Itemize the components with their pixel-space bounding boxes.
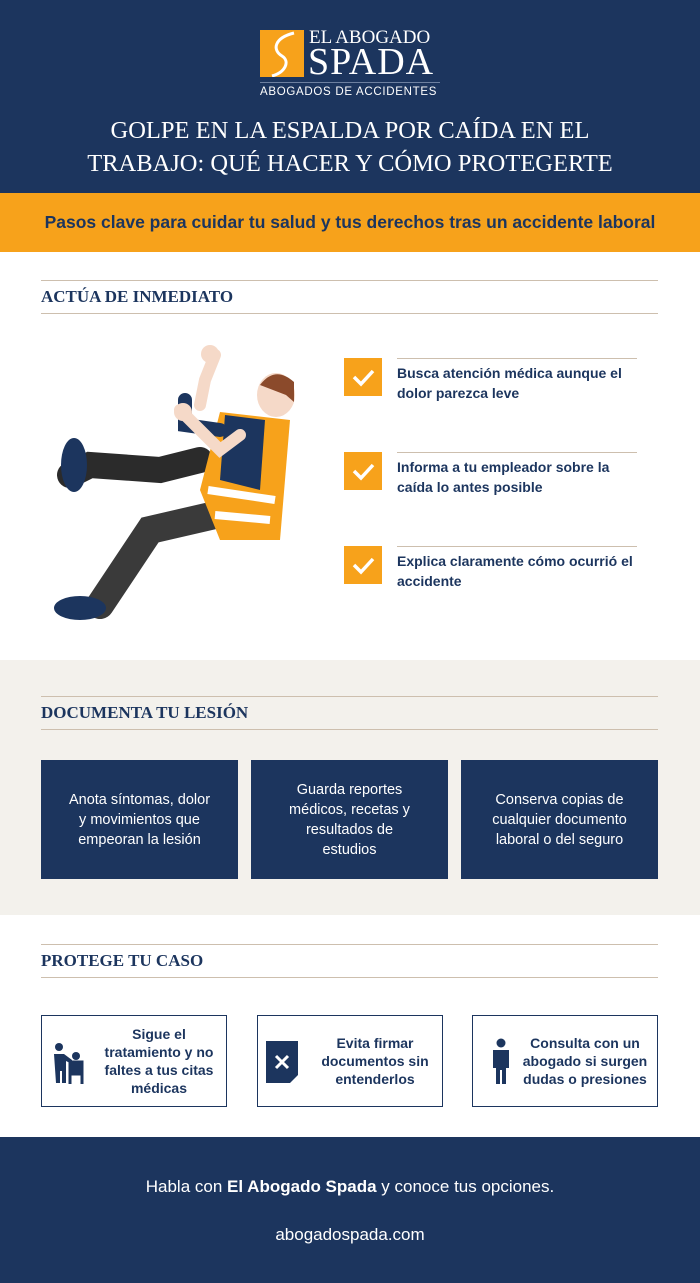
heading: documenta xyxy=(41,696,658,730)
item 3 xyxy=(344,546,637,589)
panel: documenta xyxy=(0,660,700,915)
item 1 xyxy=(344,358,637,401)
subtitle band: Pasos clave para cuidar tu salud y tus derechos tras un accidente laboral xyxy=(45,212,655,232)
box 2: Guarda reportes médicos, recetas y resultados de estudios xyxy=(289,782,410,858)
box: firmar xyxy=(257,1015,443,1107)
title: GOLPE EN LA ESPALDA POR CAÍDA EN EL xyxy=(111,117,589,144)
icon: therapist xyxy=(54,1043,84,1084)
illustration: falling worker xyxy=(54,345,295,620)
box 2 xyxy=(251,760,448,879)
footer xyxy=(0,1137,700,1283)
checklist: Explica claramente cómo ocurrió el accidente xyxy=(397,553,633,589)
logo mark xyxy=(260,30,304,77)
title xyxy=(87,117,613,177)
heading: actúa: ACTÚA DE INMEDIATO xyxy=(41,287,233,306)
title: TRABAJO: QUÉ HACER Y CÓMO PROTEGERTE xyxy=(87,150,613,177)
heading: protege xyxy=(41,944,658,978)
checklist: Busca atención médica aunque el dolor parezca leve xyxy=(397,365,622,401)
item 2 xyxy=(344,452,637,495)
box: abogado xyxy=(472,1015,658,1107)
logo: SPADA xyxy=(308,41,434,83)
footer url: abogadospada.com xyxy=(275,1225,425,1244)
icon: lawyer xyxy=(493,1038,509,1084)
logo: ABOGADOS DE ACCIDENTES xyxy=(260,86,437,98)
box: tratamiento: Sigue el tratamiento y no faltes a tus citas médicas xyxy=(105,1026,213,1096)
box 1: Anota síntomas, dolor y movimientos que empeoran la lesión xyxy=(69,792,210,848)
box: tratamiento xyxy=(41,1015,227,1107)
header xyxy=(0,0,700,193)
box: abogado: Consulta con un abogado si surgen dudas o presiones xyxy=(523,1035,647,1087)
subtitle band xyxy=(0,193,700,252)
icon: document x xyxy=(266,1041,298,1083)
box: firmar: Evita firmar documentos sin entenderlos xyxy=(321,1035,429,1087)
logo text: EL ABOGADO xyxy=(309,27,430,48)
checklist: Informa a tu empleador sobre la caída lo antes posible xyxy=(397,459,609,495)
checklist xyxy=(344,358,637,589)
box 1 xyxy=(41,760,238,879)
logo xyxy=(260,27,440,98)
heading: protege: PROTEGE TU CASO xyxy=(41,951,203,970)
heading: actúa xyxy=(41,280,658,314)
footer cta: Habla con El Abogado Spada y conoce tus opciones. xyxy=(146,1177,554,1196)
heading: documenta: DOCUMENTA TU LESIÓN xyxy=(41,703,248,722)
box 3 xyxy=(461,760,658,879)
box 3: Conserva copias de cualquier documento laboral o del seguro xyxy=(492,792,627,848)
